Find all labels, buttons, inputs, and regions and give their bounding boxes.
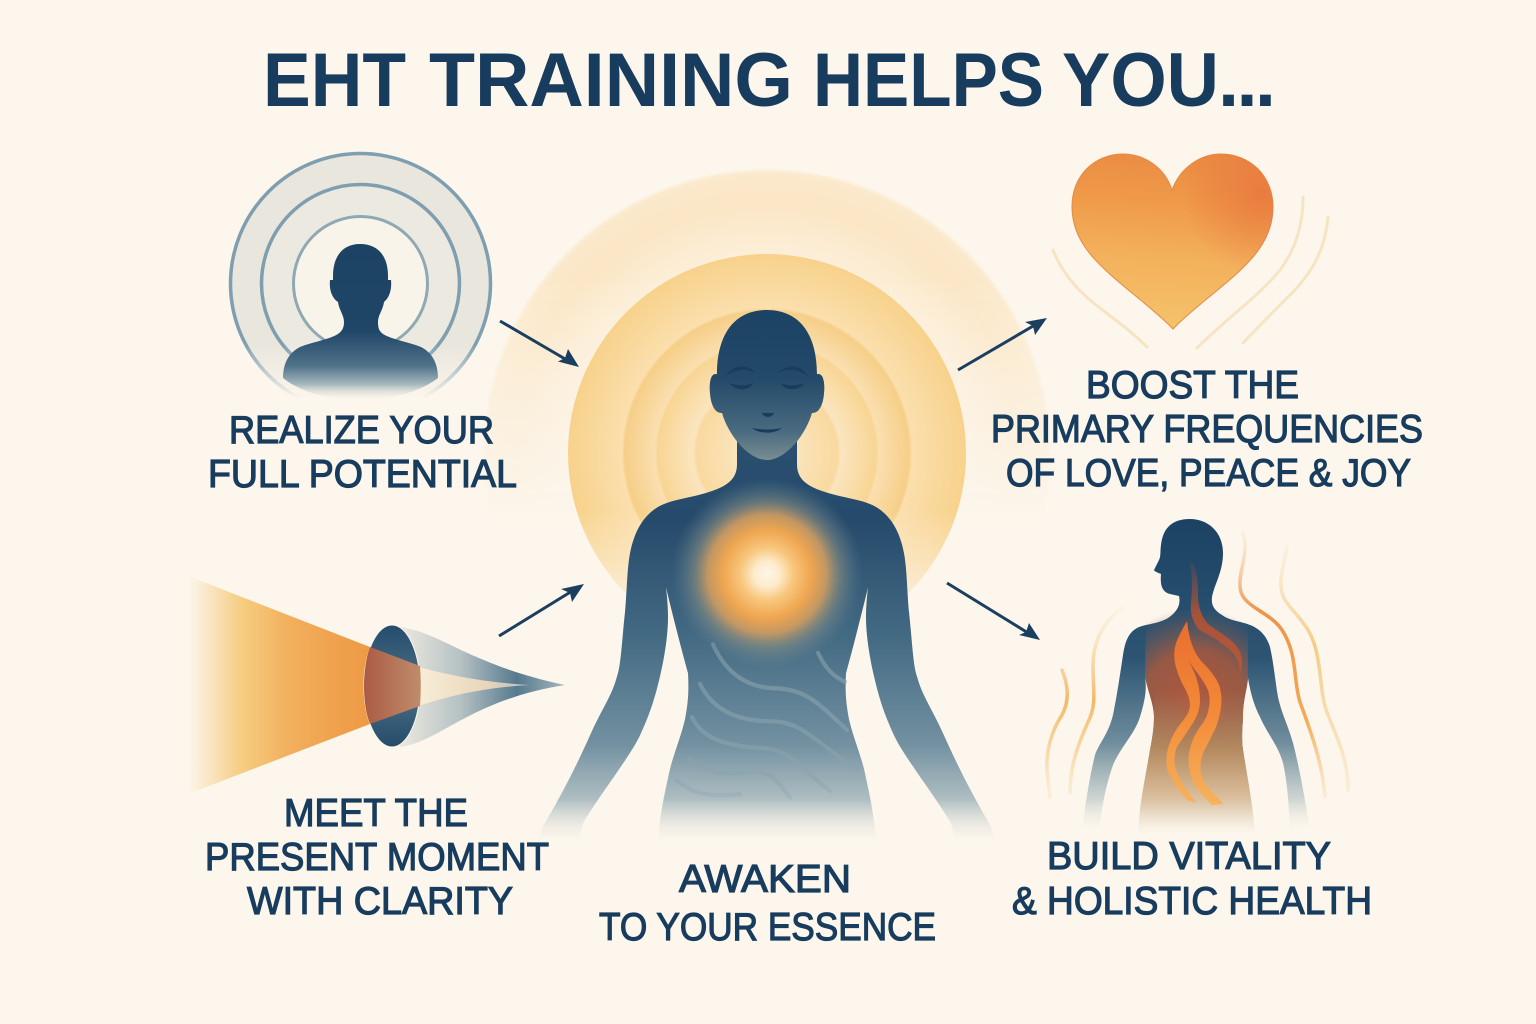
label: boost the primary frequencies: [991, 364, 1423, 495]
title: ...: [1218, 38, 1276, 123]
heart shape: [1072, 154, 1273, 329]
label: boost the primary frequencies: BOOST THE: [1086, 364, 1299, 407]
arrow: center to vitality: [947, 583, 1040, 640]
title: [263, 38, 1276, 123]
label: realize your full potential: FULL POTENTIAL: [208, 453, 517, 496]
title: EHT: [263, 38, 406, 123]
orange beam: [188, 576, 370, 794]
heart vibration lines: [1053, 197, 1328, 348]
cone behind lens: [400, 627, 565, 747]
central meditating figure: [525, 310, 1009, 875]
heart warm highlight: [1172, 154, 1273, 329]
label: build vitality and holistic health: & HOLISTIC HEALTH: [1012, 880, 1372, 923]
icon: person with concentric rings: [230, 154, 490, 414]
label: meet the present moment: WITH CLARITY: [247, 880, 513, 923]
label: boost the primary frequencies: PRIMARY FREQUENCIES: [991, 408, 1423, 451]
arrow: realize your full potential to center: [500, 321, 579, 367]
lens: [364, 625, 420, 747]
inner light of cone: [418, 667, 530, 706]
figure head: [710, 310, 824, 460]
person silhouette: [283, 244, 438, 400]
face: closed eyes, brows, nose and mouth: [726, 366, 808, 433]
lower torso warmth: [1138, 690, 1255, 832]
label: awaken to your essence: AWAKEN: [679, 858, 851, 901]
figure silhouette and face, stretched vertically: [525, 310, 1009, 875]
inner rings: [568, 254, 966, 652]
arrow: center to primary frequencies: [958, 318, 1047, 370]
spine flame: [1189, 560, 1242, 673]
arrow: present moment to center: [499, 584, 584, 636]
icon: light beam through a lens: [188, 576, 565, 794]
title: HELPS: [813, 38, 1044, 123]
rising flames: [1166, 621, 1223, 805]
label: awaken to your essence: [599, 858, 936, 949]
label: build vitality and holistic health: BUILD VITALITY: [1047, 835, 1331, 878]
warm torso glow: [1138, 610, 1255, 830]
flowing energy lines in the torso: [677, 644, 857, 797]
label: boost the primary frequencies: OF LOVE, PEACE & JOY: [1006, 452, 1411, 495]
title: TRAINING: [429, 38, 793, 123]
rings: [230, 154, 490, 414]
label: realize your full potential: REALIZE YOUR: [229, 409, 494, 452]
figure torso and arms: [525, 430, 1009, 875]
label: awaken to your essence: TO YOUR ESSENCE: [599, 906, 936, 949]
energy waves: [1047, 533, 1348, 797]
central halo: concentric glowing rings: [486, 169, 1048, 615]
icon: body with rising energy: [1047, 519, 1348, 832]
chest light: [671, 478, 863, 670]
title: YOU: [1062, 38, 1219, 123]
label: meet the present moment: [205, 792, 549, 923]
label: build vitality and holistic health: [1012, 835, 1372, 923]
beam through lens: [364, 647, 421, 724]
label: meet the present moment: PRESENT MOMENT: [205, 836, 549, 879]
side-view figure: [1082, 519, 1310, 830]
label: realize your full potential: [208, 409, 517, 496]
outer halo: [486, 169, 1048, 466]
label: meet the present moment: MEET THE: [284, 792, 468, 835]
icon: heart: [1053, 154, 1328, 348]
